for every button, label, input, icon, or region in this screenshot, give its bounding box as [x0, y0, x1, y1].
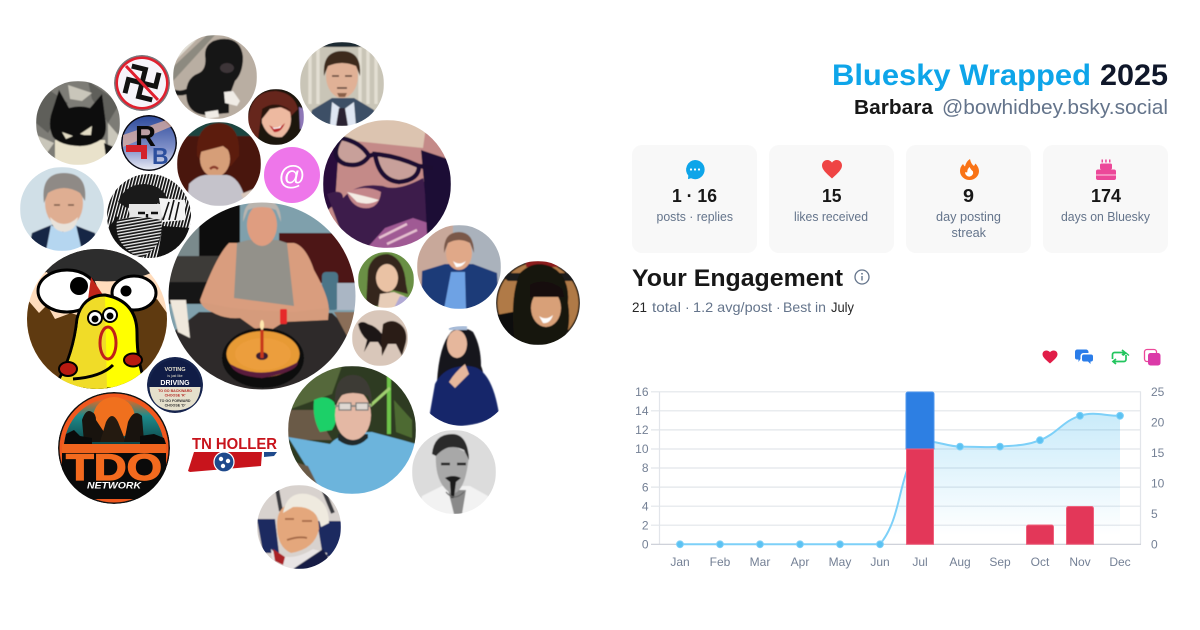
cumulative line [680, 414, 1120, 544]
icon: legend likes [1042, 350, 1058, 364]
user name and handle [854, 97, 1168, 119]
icon: legend quotes [1144, 350, 1160, 366]
left axis labels: 0 [642, 538, 649, 552]
stat card: likes received [769, 145, 894, 253]
left axis labels: 2 [642, 518, 649, 532]
avatar: voting badge: CHOOSE 'R' [165, 394, 186, 398]
stat card: day posting streak [906, 145, 1031, 253]
engagement summary [632, 299, 854, 315]
avatar: TDO Network logo: NETWORK [87, 480, 143, 490]
left axis labels: 8 [642, 461, 649, 475]
stat card: day posting streak: day posting [936, 210, 1001, 224]
avatar: voting badge [147, 357, 203, 413]
stat card: days on Bluesky [1043, 145, 1168, 253]
avatar: sleeping man in suit [257, 485, 341, 569]
stat card: days on Bluesky: days on Bluesky [1061, 210, 1151, 224]
engagement summary: 21 [632, 299, 647, 315]
avatar: TDO Network logo: TDO [66, 447, 162, 488]
stat card: posts and replies: posts · replies [656, 210, 733, 224]
right axis labels [1151, 385, 1165, 552]
month labels: Jun [870, 555, 890, 569]
avatar: RB logo: R [135, 121, 156, 153]
avatar: black curly dog [173, 35, 257, 119]
avatar: at-sign placeholder: @ [278, 160, 306, 190]
avatar: voting badge: TO GO BACKWARD [158, 389, 192, 393]
avatar: man in blue jacket and checked shirt [417, 225, 501, 309]
month labels: May [829, 555, 851, 569]
month labels: Oct [1031, 555, 1050, 569]
cumulative area [880, 414, 1120, 544]
engagement summary: total [652, 299, 681, 315]
month labels: Jul [912, 555, 928, 569]
left axis labels: 16 [635, 385, 649, 399]
avatar: woman with red hair [248, 89, 304, 145]
avatar: voting badge: DRIVING [160, 380, 190, 387]
avatar: woodcut bearded man [107, 174, 191, 258]
month labels: Dec [1109, 555, 1131, 569]
stat card: likes received: 15 [822, 186, 842, 206]
avatar: TDO Network logo [58, 392, 170, 504]
engagement summary: · [685, 299, 690, 315]
icon: info [855, 270, 869, 284]
title: Bluesky Wrapped [832, 59, 1091, 92]
bar: November likes [1066, 506, 1094, 544]
avatar: smiling man with glasses [323, 120, 451, 248]
month labels: Nov [1069, 555, 1091, 569]
avatar: black cat on mosaic [36, 81, 120, 165]
avatar: greyscale man with goatee [412, 430, 496, 514]
user name and handle: Barbara [854, 97, 934, 119]
month labels [670, 555, 1131, 569]
avatar: cartoon chicken [27, 249, 167, 389]
stat card: posts and replies: 1 · 16 [672, 186, 717, 206]
combo chart: engagement by month [635, 385, 1165, 569]
engagement summary: July [831, 299, 854, 315]
month labels: Mar [750, 555, 770, 569]
month labels: Aug [949, 555, 971, 569]
icon: speech bubble [686, 160, 705, 179]
avatar: voting badge: is just like [167, 374, 183, 378]
stat card: likes received: likes received [794, 210, 868, 224]
avatar: voting badge: VOTING [164, 367, 186, 373]
bar: July replies [906, 392, 934, 449]
icon: heart [822, 160, 842, 178]
user name and handle: @bowhidbey.bsky.social [942, 97, 1168, 119]
engagement summary: · [776, 299, 781, 315]
avatar: woman with birthday pie [168, 201, 357, 390]
icon: flame [960, 159, 979, 180]
avatar: prohibition sign [114, 55, 170, 111]
bar: October likes [1026, 525, 1054, 544]
right axis labels: 25 [1151, 385, 1165, 399]
stat card: posts and replies [632, 145, 757, 253]
bar: July likes [906, 449, 934, 544]
avatar: toddler with dark hair [177, 122, 261, 206]
stat card: days on Bluesky: 174 [1091, 186, 1121, 206]
icon: legend replies [1075, 350, 1093, 364]
stat card: day posting streak: streak [952, 226, 987, 240]
line points [677, 412, 1123, 548]
avatar: two small dark dogs [352, 310, 408, 366]
month labels: Apr [791, 555, 809, 569]
heading: Your Engagement: Your Engagement [632, 265, 843, 292]
avatar: woman in navy jacket, cut-out [429, 326, 499, 426]
left axis labels: 4 [642, 500, 649, 514]
right axis labels: 20 [1151, 416, 1165, 430]
avatar: woman with dark hair on green [358, 252, 414, 308]
avatar: older man in cap and blue sweatshirt [288, 366, 416, 494]
avatar: man in grey suit and dark tie [300, 42, 384, 126]
left axis labels: 10 [635, 442, 649, 456]
month labels: Feb [710, 555, 731, 569]
right axis labels: 5 [1151, 507, 1158, 521]
right axis labels: 15 [1151, 446, 1165, 460]
right axis labels: 10 [1151, 476, 1165, 490]
avatar: woman with black fringe smiling [496, 261, 580, 345]
left axis labels: 14 [635, 404, 649, 418]
avatar: voting badge: TO GO FORWARD [159, 399, 191, 403]
left axis labels [635, 385, 649, 552]
stat card: day posting streak: 9 [963, 186, 974, 206]
engagement summary: 1.2 avg/post [693, 299, 772, 315]
month labels: Sep [989, 555, 1011, 569]
logo: TN Holler: TN HOLLER [192, 436, 277, 453]
avatar: RB logo [121, 115, 177, 171]
month labels: Jan [670, 555, 690, 569]
icon: birthday cake [1096, 160, 1116, 180]
engagement summary: Best in [783, 299, 826, 315]
left axis labels: 6 [642, 480, 649, 494]
avatar: older man in suit on pale background [20, 167, 104, 251]
avatar: voting badge: CHOOSE 'D' [165, 404, 186, 408]
title: 2025 [1100, 59, 1168, 92]
icon: legend reposts [1112, 350, 1129, 364]
avatar: at-sign placeholder [264, 147, 320, 203]
chart legend icons [1042, 350, 1160, 366]
left axis labels: 12 [635, 423, 649, 437]
right axis labels: 0 [1151, 538, 1158, 552]
avatar: RB logo: B [152, 143, 169, 169]
logo: TN Holler [188, 436, 277, 472]
